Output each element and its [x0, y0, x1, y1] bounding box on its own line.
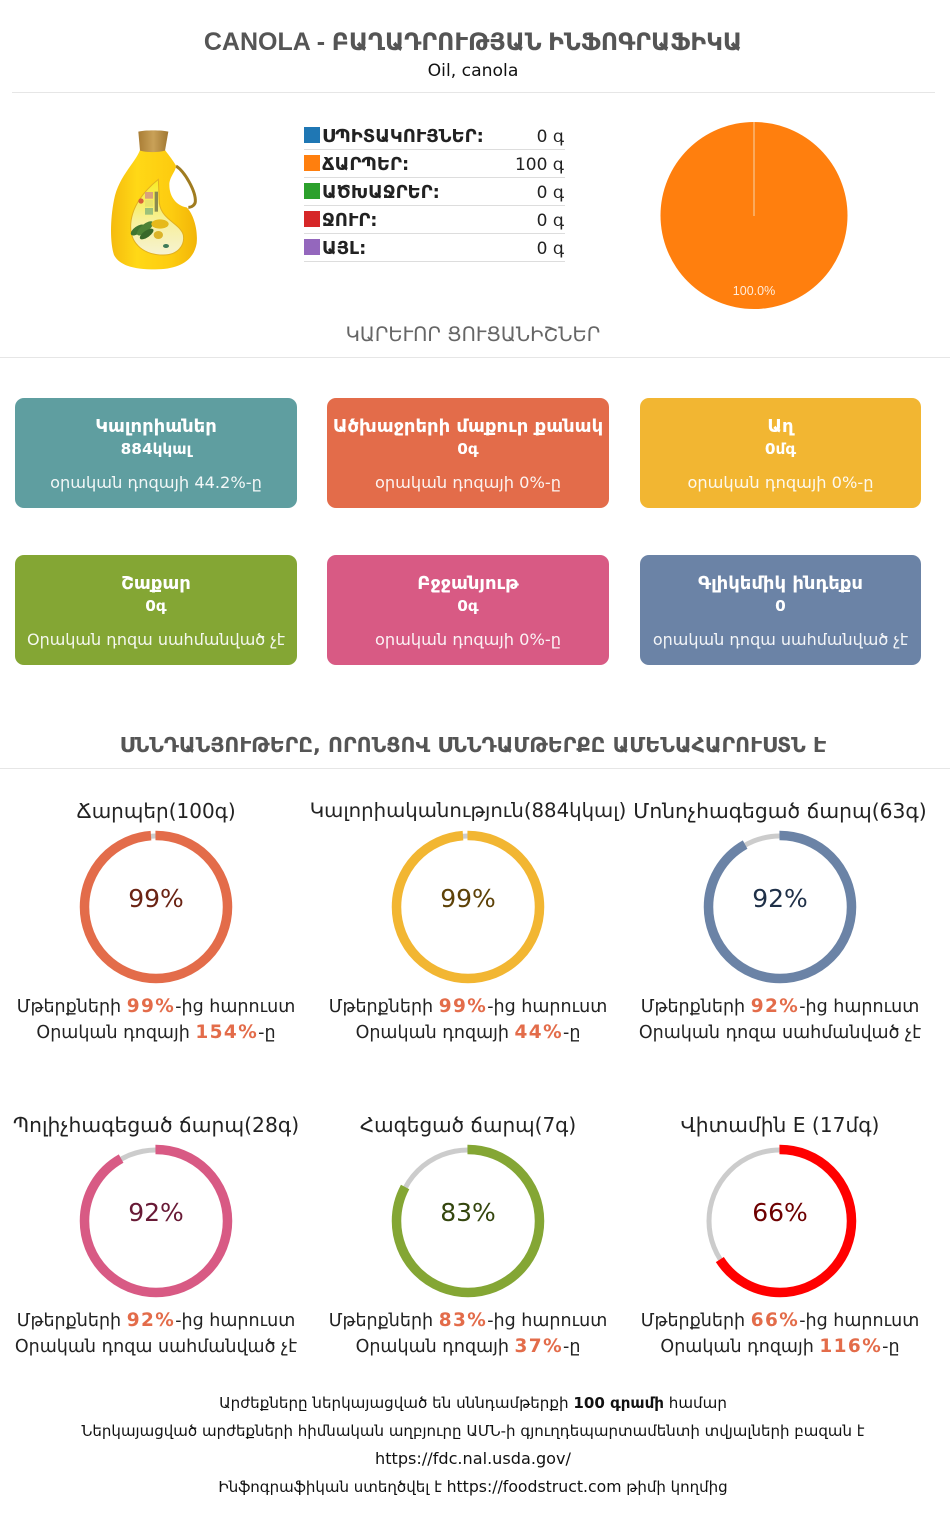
legend row: other: [304, 233, 565, 262]
nutrient: polyunsaturated fat: Պոլիչհագեցած ճարպ(28գ): [13, 1113, 299, 1137]
card: salt: 0մգ: [765, 440, 796, 458]
legend row: protein: [304, 121, 565, 150]
nutrient: calories: Օրական դոզայի 44%-ը: [356, 1022, 580, 1043]
nutrient: monounsaturated fat: Օրական դոզա սահմանված չէ: [639, 1023, 921, 1043]
ring: 99%: [80, 830, 232, 984]
ring: 66%: [706, 1144, 856, 1298]
heading: richest nutrients: ՍՆՆԴԱՆՅՈՒԹԵՐԸ, ՈՐՈՆՑՈՎ ՍՆՆԴԱՄԹԵՐՔԸ ԱՄԵՆԱՀԱՐՈՒՍՏՆ Է: [120, 733, 826, 757]
footer notes: https://fdc.nal.usda.gov/: [375, 1449, 571, 1468]
card: fiber: 0գ: [457, 597, 479, 615]
card: net carbs: Ածխաջրերի մաքուր քանակ: [333, 416, 603, 437]
card: net carbs: [327, 398, 609, 508]
legend row: water: 0 գ: [537, 210, 564, 230]
footer notes: Ինֆոգրաֆիկան ստեղծվել է https://foodstruct.com թիմի կողմից: [218, 1477, 728, 1496]
card: glycemic index: [640, 555, 921, 665]
footer notes: [81, 1394, 865, 1496]
legend row: water: ՋՈՒՐ:: [322, 210, 378, 230]
legend row: fat: [304, 149, 565, 178]
pie chart: [660, 122, 848, 309]
nutrient: vitamin E: Օրական դոզայի 116%-ը: [660, 1336, 900, 1357]
card: calories: օրական դոզայի 44.2%-ը: [50, 473, 262, 492]
card: glycemic index: Գլիկեմիկ ինդեքս: [698, 573, 863, 594]
nutrient: polyunsaturated fat: [13, 1113, 299, 1357]
card: calories: [15, 398, 297, 508]
nutrient: monounsaturated fat: [633, 799, 927, 1043]
card: sugar: Օրական դոզա սահմանված չէ: [27, 630, 285, 649]
ring: 92%: 92%: [752, 884, 808, 913]
card: sugar: Շաքար: [121, 573, 191, 594]
legend row: carbohydrates: 0 գ: [537, 182, 564, 202]
heading: key indicators: ԿԱՐԵՒՈՐ ՑՈՒՑԱՆԻՇՆԵՐ: [346, 323, 600, 346]
nutrient: fats: Ճարպեր(100գ): [76, 799, 236, 823]
legend row: carbohydrates: [304, 177, 565, 206]
legend row: fat: ՃԱՐՊԵՐ:: [322, 154, 409, 174]
nutrient: saturated fat: Մթերքների 83%-ից հարուստ: [329, 1310, 607, 1331]
card: fiber: Բջջանյութ: [417, 573, 519, 594]
card: net carbs: 0գ: [457, 440, 479, 458]
ring: 99%: 99%: [440, 884, 496, 913]
ring: 83%: 83%: [440, 1198, 496, 1227]
legend row: water: [304, 205, 565, 234]
card: salt: [640, 398, 921, 508]
card: fiber: [327, 555, 609, 665]
card: salt: Աղ: [767, 416, 794, 437]
card: calories: Կալորիաներ: [95, 416, 217, 437]
nutrient: calories: Կալորիականություն(884կկալ): [310, 799, 626, 822]
nutrient: fats: Օրական դոզայի 154%-ը: [36, 1022, 276, 1043]
nutrient: calories: [310, 799, 626, 1043]
card: glycemic index: 0: [775, 597, 786, 615]
nutrient: monounsaturated fat: Մթերքների 92%-ից հարուստ: [641, 996, 919, 1017]
card: sugar: [15, 555, 297, 665]
title: CANOLA - ԲԱՂԱԴՐՈՒԹՅԱՆ ԻՆՖՈԳՐԱՖԻԿԱ: [204, 28, 742, 56]
card: calories: 884կկալ: [121, 440, 191, 458]
card: net carbs: օրական դոզայի 0%-ը: [375, 473, 561, 492]
subtitle: Oil, canola: [428, 61, 518, 81]
legend: macronutrients: [304, 126, 565, 262]
ring: 92%: [704, 830, 856, 984]
nutrient: saturated fat: Օրական դոզայի 37%-ը: [356, 1336, 580, 1357]
nutrient: saturated fat: [329, 1113, 607, 1357]
legend row: other: 0 գ: [537, 238, 564, 258]
ring: 83%: [392, 1144, 544, 1298]
nutrient: saturated fat: Հագեցած ճարպ(7գ): [360, 1113, 576, 1137]
card: glycemic index: օրական դոզա սահմանված չէ: [653, 630, 908, 649]
legend row: other: ԱՅԼ:: [322, 238, 366, 258]
ring: 99%: 99%: [128, 884, 184, 913]
nutrient: vitamin E: Մթերքների 66%-ից հարուստ: [641, 1310, 919, 1331]
nutrient: fats: [17, 799, 295, 1043]
pie chart: 100.0%: [733, 284, 775, 298]
nutrient: fats: Մթերքների 99%-ից հարուստ: [17, 996, 295, 1017]
footer notes: Ներկայացված արժեքների հիմնական աղբյուրը ԱՄՆ-ի գյուղդեպարտամենտի տվյալների բազան է: [81, 1422, 865, 1440]
nutrient: vitamin E: Վիտամին E (17մգ): [681, 1113, 879, 1137]
nutrient: calories: Մթերքների 99%-ից հարուստ: [329, 996, 607, 1017]
legend row: fat: 100 գ: [515, 154, 564, 174]
icon: canola oil bottle: [111, 130, 197, 270]
nutrient: vitamin E: [641, 1113, 919, 1357]
ring: 66%: 66%: [752, 1198, 808, 1227]
card: sugar: 0գ: [145, 597, 167, 615]
legend row: carbohydrates: ԱԾԽԱՋՐԵՐ:: [322, 182, 440, 202]
nutrient: polyunsaturated fat: Օրական դոզա սահմանված չէ: [15, 1337, 297, 1357]
ring: 92%: [80, 1144, 232, 1298]
footer notes: Արժեքները ներկայացված են սննդամթերքի 100 գրամի համար: [219, 1394, 727, 1412]
ring: 92%: 92%: [128, 1198, 184, 1227]
nutrient: monounsaturated fat: Մոնոչհագեցած ճարպ(63գ): [633, 799, 927, 823]
legend row: protein: ՍՊԻՏԱԿՈՒՅՆԵՐ:: [322, 126, 484, 146]
ring: 99%: [392, 830, 544, 984]
nutrient: polyunsaturated fat: Մթերքների 92%-ից հարուստ: [17, 1310, 295, 1331]
card: salt: օրական դոզայի 0%-ը: [688, 473, 873, 492]
legend row: protein: 0 գ: [537, 126, 564, 146]
card: fiber: օրական դոզայի 0%-ը: [375, 630, 561, 649]
